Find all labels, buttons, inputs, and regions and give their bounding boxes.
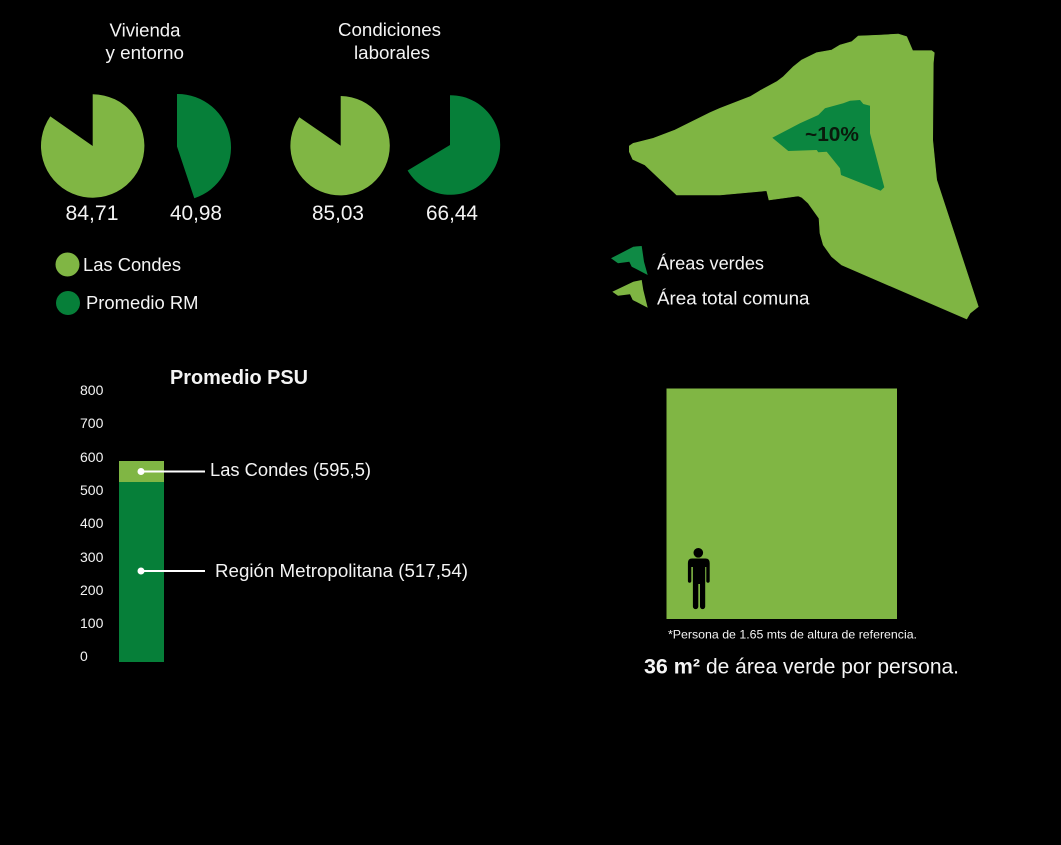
legend item: Área total comuna: Área total comuna [657,288,810,308]
heading: Condiciones laborales: laborales [354,42,430,63]
pie chart: Condiciones laborales Las Condes 85,03: 85,03 [312,202,364,225]
icon: person for scale [688,548,710,609]
green area square: 36 m² per person [666,388,897,619]
y axis labels: 100 [80,615,104,631]
y axis labels: 600 [80,449,104,465]
heading: Vivienda y entorno [106,20,184,63]
caption: 36 m² de área verde por persona: 36 m² [644,656,700,678]
pie chart: Vivienda Las Condes 84,71: 84,71 [66,202,118,225]
map outline: total comuna area [629,34,978,319]
legend: map [611,246,810,308]
y axis labels: 0 [80,648,88,664]
bar: Las Condes segment [119,461,164,482]
y axis labels: 300 [80,549,104,565]
caption: 36 m² de área verde por persona: de área verde por persona. [706,656,959,678]
map inset: green areas [772,100,884,191]
pie chart: Condiciones laborales Las Condes 85,03 [290,96,390,225]
pie chart: Vivienda Promedio RM 40,98: 40,98 [170,202,222,225]
y axis labels: 800 [80,382,104,398]
pie chart: Vivienda Las Condes 84,71 [41,94,144,225]
heading: Condiciones laborales: Condiciones [338,19,441,40]
heading: Condiciones laborales [338,19,441,63]
y axis labels: 400 [80,515,104,531]
legend item: Promedio RM [56,291,198,315]
y axis labels: 700 [80,415,104,431]
legend item: Las Condes [56,252,181,276]
y axis labels: 500 [80,482,104,498]
pie chart: Vivienda Promedio RM 40,98 [170,94,231,225]
legend item: Promedio RM: Promedio RM [86,292,198,313]
map: comuna with green area share [629,34,978,319]
pie chart: Condiciones laborales Promedio RM 66,44: 66,44 [426,202,478,225]
heading: Vivienda y entorno: y entorno [106,42,184,63]
y axis labels: 200 [80,582,104,598]
legend item: Área total comuna [612,280,810,308]
map label: ~10%: ~10% [805,124,859,146]
y axis labels [80,382,104,664]
legend item: Las Condes: Las Condes [83,254,181,275]
bar: Región Metropolitana segment [119,482,164,662]
heading: Vivienda y entorno: Vivienda [110,20,181,40]
bar chart: Promedio PSU [80,382,468,664]
chart title: Promedio PSU: Promedio PSU [170,367,308,389]
legend item: Áreas verdes [611,246,764,275]
legend: pie charts [56,252,198,315]
callout: Región Metropolitana 517,54: Región Metropolitana (517,54) [215,560,468,581]
callout: Las Condes 595,5: Las Condes (595,5) [210,459,371,480]
footnote: person reference height: *Persona de 1.65 mts de altura de referencia. [668,628,917,642]
pie chart: Condiciones laborales Promedio RM 66,44 [408,95,500,225]
callout: Las Condes 595,5 [138,459,371,480]
legend item: Áreas verdes: Áreas verdes [657,252,764,274]
